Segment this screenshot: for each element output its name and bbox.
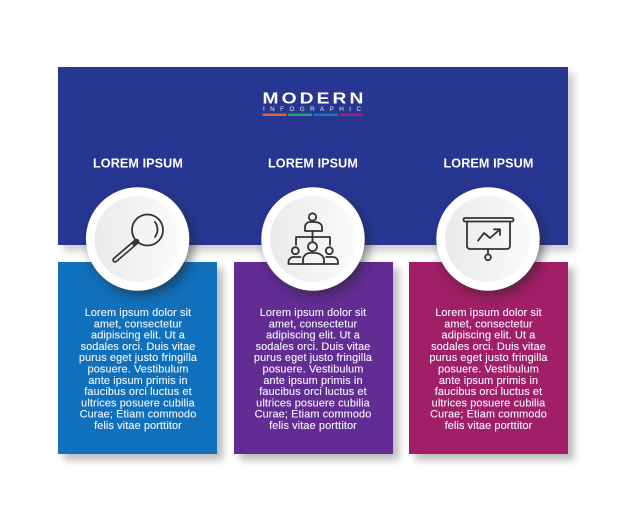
text block: crimson column: purus eget justo fringilla xyxy=(429,352,548,364)
text block: crimson column: adipiscing elit. Ut a xyxy=(442,330,536,342)
text block: blue column: sodales orci. Duis vitae xyxy=(81,341,195,353)
text block: purple column: posuere. Vestibulum xyxy=(263,364,363,376)
text block: purple column: faucibus orci luctus et xyxy=(259,386,367,398)
icon: magnifier badge xyxy=(86,187,194,296)
text block: crimson column: Lorem ipsum dolor sit xyxy=(435,307,542,319)
panel: blue column xyxy=(58,262,223,460)
text block: blue column: Curae; Etiam commodo xyxy=(80,409,196,421)
text block: blue column: Lorem ipsum dolor sit xyxy=(85,307,191,319)
text block: crimson column: sodales orci. Duis vitae xyxy=(431,341,546,353)
logo: modern infographic xyxy=(262,90,366,116)
text block: blue column: purus eget justo fringilla xyxy=(79,352,198,364)
icon: team hierarchy badge xyxy=(261,187,369,296)
text block: purple column: adipiscing elit. Ut a xyxy=(266,330,361,342)
text block: crimson column: faucibus orci luctus et xyxy=(435,386,542,398)
heading: column three: LOREM IPSUM xyxy=(444,156,533,170)
panel: crimson column xyxy=(409,262,574,460)
text block: blue column: felis vitae porttitor xyxy=(94,420,182,432)
text block: crimson column: ante ipsum primis in xyxy=(439,375,538,387)
text block: purple column: ultrices posuere cubilia xyxy=(256,397,371,409)
text block: purple column: Curae; Etiam commodo xyxy=(255,409,371,421)
text block: crimson column xyxy=(429,307,548,432)
text block: blue column: posuere. Vestibulum xyxy=(88,364,188,376)
text block: purple column: felis vitae porttitor xyxy=(269,420,357,432)
icon: presentation board badge xyxy=(436,187,544,296)
text block: blue column: ante ipsum primis in xyxy=(88,375,188,387)
text block: purple column: ante ipsum primis in xyxy=(263,375,363,387)
text block: crimson column: amet, consectetur xyxy=(444,318,533,330)
logo: modern infographic: MODERN xyxy=(262,90,366,108)
text block: crimson column: posuere. Vestibulum xyxy=(438,364,539,376)
panel: header band xyxy=(58,67,574,251)
text block: blue column: adipiscing elit. Ut a xyxy=(91,330,186,342)
text block: purple column: amet, consectetur xyxy=(269,318,358,330)
text block: blue column xyxy=(79,307,198,432)
text block: crimson column: ultrices posuere cubilia xyxy=(432,397,546,409)
heading: column one: LOREM IPSUM xyxy=(93,156,183,170)
logo: modern infographic: INFOGRAPHIC xyxy=(263,106,361,113)
panel: purple column xyxy=(234,262,399,460)
text block: blue column: ultrices posuere cubilia xyxy=(81,397,196,409)
text block: purple column: sodales orci. Duis vitae xyxy=(256,341,370,353)
text block: blue column: amet, consectetur xyxy=(94,318,183,330)
text block: purple column xyxy=(254,307,373,432)
text block: crimson column: Curae; Etiam commodo xyxy=(430,409,547,421)
text block: purple column: Lorem ipsum dolor sit xyxy=(260,307,366,319)
text block: crimson column: felis vitae porttitor xyxy=(445,420,533,432)
heading: column two: LOREM IPSUM xyxy=(268,156,358,170)
text block: blue column: faucibus orci luctus et xyxy=(84,386,192,398)
text block: purple column: purus eget justo fringilla xyxy=(254,352,373,364)
